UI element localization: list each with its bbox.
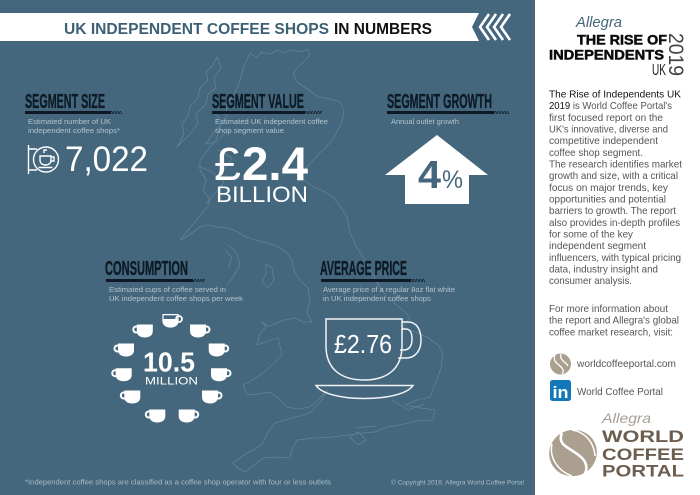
description: Annual outlet growth xyxy=(391,117,459,126)
description: in UK independent coffee shops xyxy=(323,294,431,303)
panel: segment value: 2.4 xyxy=(242,137,308,190)
description: UK independent coffee shops per week xyxy=(109,294,243,303)
website link: worldcoffeeportal.com xyxy=(576,358,676,370)
description: independent coffee shops* xyxy=(28,126,120,135)
logo: Allegra World Coffee Portal: WORLD xyxy=(602,428,684,446)
report description: also provides in-depth profiles xyxy=(549,217,680,229)
panel: average price xyxy=(316,257,455,398)
value: 10.5 xyxy=(143,346,195,378)
description: Average price of a regular 8oz flat white xyxy=(323,285,455,294)
value: £2.76 xyxy=(334,329,392,359)
icon: LinkedIn: in xyxy=(552,384,568,402)
report description: consumer analysis. xyxy=(549,275,632,287)
report description: data, industry insight and xyxy=(549,264,658,276)
icon: coffee bean xyxy=(542,422,604,484)
panel: consumption: MILLION xyxy=(145,376,198,388)
logo: Allegra World Coffee Portal: PORTAL xyxy=(602,462,684,480)
report logo xyxy=(549,15,687,79)
report description: competitive independent xyxy=(549,135,658,147)
report logo: UK xyxy=(652,62,666,79)
report description: influencers, with typical pricing xyxy=(549,252,681,264)
panel: segment growth: % xyxy=(442,166,463,194)
report description: focus on major trends, key xyxy=(549,182,669,194)
heading: CONSUMPTION xyxy=(105,257,188,280)
report logo: Allegra xyxy=(575,15,622,31)
report description xyxy=(549,88,682,287)
icon: website bean xyxy=(550,354,571,374)
report description: UK's innovative, diverse and xyxy=(549,124,668,136)
heading: SEGMENT GROWTH xyxy=(387,90,492,113)
value: 4 xyxy=(418,154,441,197)
report description: first focused report on the xyxy=(549,112,663,124)
report logo: THE RISE OF xyxy=(577,32,667,48)
report description: opportunities and potential xyxy=(549,194,666,206)
map: UK outline xyxy=(177,49,443,472)
panel: segment growth xyxy=(385,90,509,204)
panel: segment value: BILLION xyxy=(216,182,308,207)
icon: LinkedIn xyxy=(550,380,571,402)
heading: SEGMENT SIZE xyxy=(25,90,105,113)
logo: Allegra World Coffee Portal: Allegra xyxy=(601,410,651,426)
value: £ xyxy=(214,138,241,190)
report description: 2019 is World Coffee Portal's xyxy=(549,100,672,112)
report description: coffee shop segment. xyxy=(549,147,643,159)
description: Estimated number of UK xyxy=(28,117,111,126)
report description: The research identifies market xyxy=(549,158,682,170)
value: 7,022 xyxy=(65,140,148,179)
description: shop segment value xyxy=(215,126,284,135)
icon: coffee shop sign xyxy=(28,145,58,174)
panel: segment value xyxy=(212,90,328,207)
copyright: © Copyright 2019, Allegra World Coffee Portal xyxy=(391,478,524,486)
title banner: IN NUMBERS xyxy=(334,21,432,38)
description: Estimated UK independent coffee xyxy=(215,117,328,126)
icon: ring of cups xyxy=(112,315,230,422)
arrow xyxy=(385,135,488,204)
report description: for some of the key xyxy=(549,228,634,240)
more information text: the report and Allegra's global xyxy=(549,315,679,327)
more information text: coffee market research, visit: xyxy=(549,326,673,338)
report description: growth and size, with a critical xyxy=(549,170,678,182)
report logo: 2019 xyxy=(664,33,687,76)
panel: consumption xyxy=(105,257,243,422)
heading: SEGMENT VALUE xyxy=(212,90,304,113)
description: Estimated cups of coffee served in xyxy=(109,285,226,294)
LinkedIn link: World Coffee Portal xyxy=(577,386,663,398)
panel: sidebar xyxy=(535,0,700,495)
chevrons xyxy=(480,14,510,40)
title text: UK INDEPENDENT COFFEE SHOPS xyxy=(64,21,329,38)
logo: Allegra World Coffee Portal: COFFEE xyxy=(602,446,684,464)
more information text xyxy=(549,303,679,338)
panel: segment size xyxy=(25,90,148,179)
report description: independent segment xyxy=(549,240,646,252)
footnote: *Independent coffee shops are classified as a coffee shop operator with four or less outlets xyxy=(25,478,331,486)
icon: cup and saucer xyxy=(316,319,421,398)
heading: AVERAGE PRICE xyxy=(320,257,407,280)
report description: barriers to growth. The report xyxy=(549,205,676,217)
report description: The Rise of Independents UK xyxy=(549,88,681,100)
logo: Allegra World Coffee Portal xyxy=(542,410,684,484)
more information text: For more information about xyxy=(549,303,668,315)
title banner xyxy=(0,13,510,41)
panel: main background xyxy=(0,0,535,495)
report logo: INDEPENDENTS xyxy=(549,46,664,62)
